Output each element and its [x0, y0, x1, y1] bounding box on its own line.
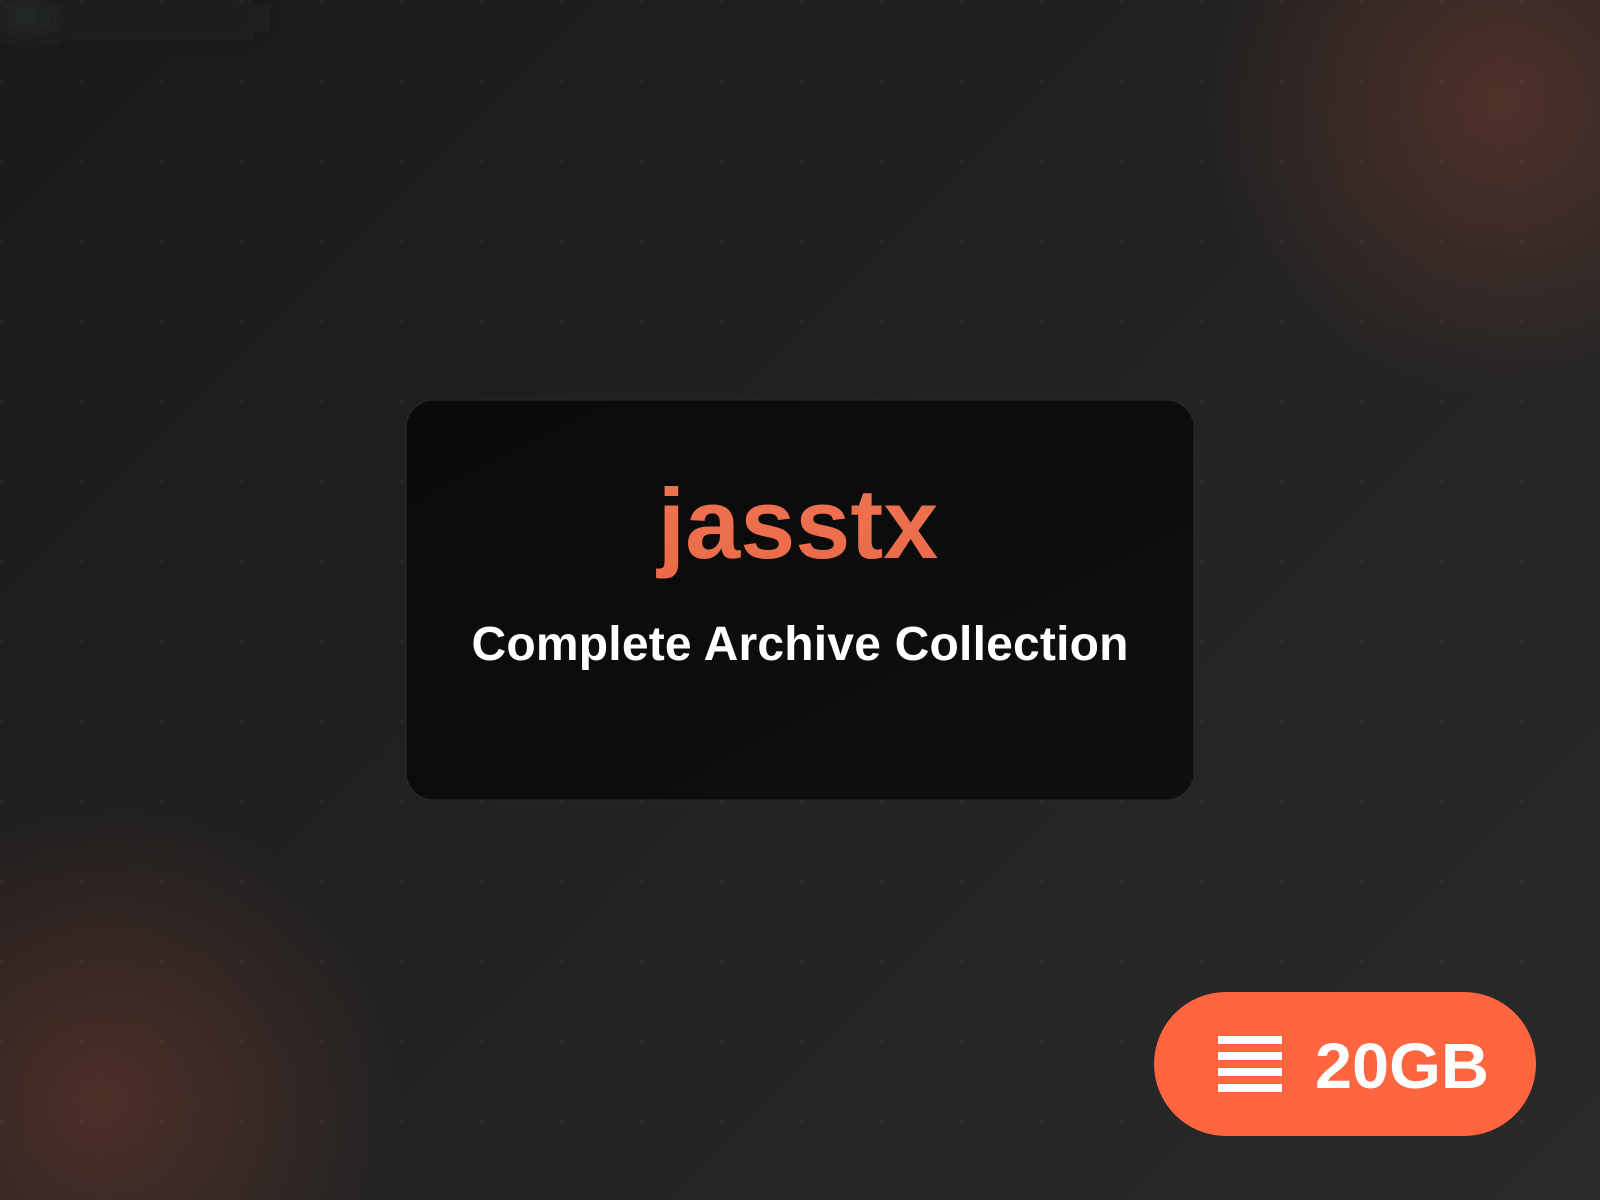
panel: title card: [406, 400, 1194, 800]
glow: top right: [1200, 0, 1600, 400]
blurred smear: top left: [0, 0, 262, 32]
icon: storage bars: [1218, 1036, 1282, 1092]
size badge: [1154, 992, 1536, 1136]
size label: 20GB: [1315, 1030, 1489, 1102]
subtitle: Complete Archive Collection: [472, 618, 1128, 671]
title: jasstx: [656, 468, 938, 579]
glow: bottom left: [0, 800, 400, 1200]
